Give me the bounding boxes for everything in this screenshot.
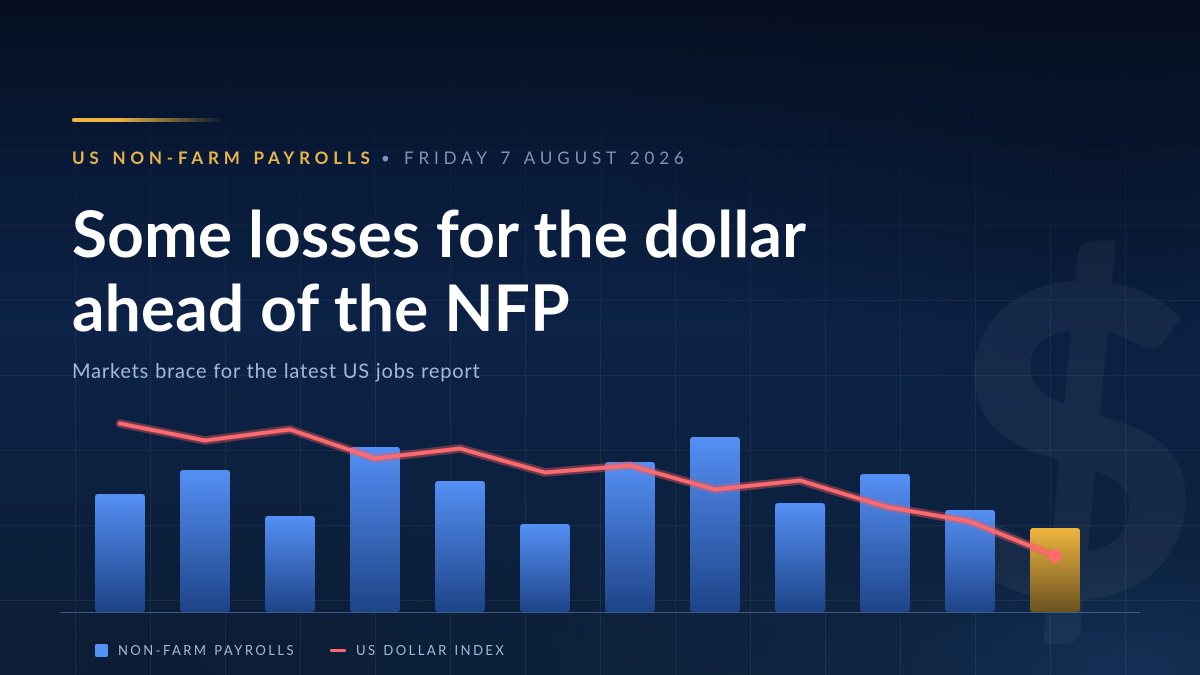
latest point marker — [1048, 550, 1062, 562]
legend label: payrolls: NON-FARM PAYROLLS — [118, 642, 296, 658]
legend swatch: bar — [95, 644, 108, 657]
kicker: • — [381, 149, 390, 167]
kicker — [72, 147, 689, 168]
kicker: FRIDAY 7 AUGUST 2026 — [404, 147, 689, 168]
title — [72, 194, 806, 345]
accent rule — [72, 118, 224, 122]
dollar index line — [120, 424, 1055, 556]
axis baseline — [60, 612, 1140, 613]
title: Some losses for the dollar — [72, 194, 806, 271]
bars — [95, 437, 1080, 612]
kicker: US NON-FARM PAYROLLS — [72, 147, 375, 168]
legend swatch: line — [330, 649, 346, 652]
legend label: dollar index: US DOLLAR INDEX — [356, 642, 506, 658]
legend: non-farm payrolls — [95, 642, 296, 658]
title: ahead of the NFP — [72, 268, 570, 345]
subtitle: Markets brace for the latest US jobs report — [72, 359, 480, 383]
legend: us dollar index — [330, 642, 506, 658]
